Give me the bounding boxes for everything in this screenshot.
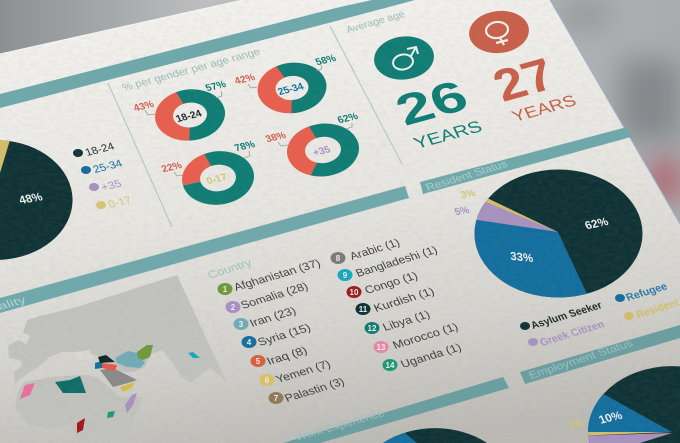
- donut: 25-34: 25-34: [276, 81, 306, 98]
- donut percentage labels: 38%: [264, 130, 288, 145]
- country list: Syria (15): [256, 322, 313, 349]
- country list: Yemen (7): [274, 359, 333, 386]
- donut: +35: [285, 120, 361, 180]
- pie value: 10%: 10%: [597, 410, 624, 427]
- pie chart: work experience: [383, 428, 487, 443]
- pie chart: resident status: [454, 170, 642, 298]
- donut percentage labels: 62%: [336, 111, 360, 126]
- map: countries of origin: [8, 275, 227, 443]
- country list: Libya (1): [381, 309, 432, 334]
- heading: average age: Average age: [344, 9, 407, 36]
- country list: Congo (1): [363, 270, 420, 297]
- donut percentage labels: 42%: [233, 72, 257, 87]
- legend: resident status: Refugee: [624, 281, 670, 304]
- country list: Bangladeshi (1): [354, 244, 440, 280]
- heading: country: Country: [206, 257, 255, 282]
- country list: 9: [343, 271, 348, 280]
- stat: female average 27 years: [485, 48, 579, 126]
- country list: 4: [247, 338, 252, 347]
- divider lines: [108, 26, 402, 227]
- icon: female symbol: [467, 8, 531, 56]
- legend: age range: 18-24: [83, 141, 116, 159]
- legend: resident status: Greek Citizen: [538, 319, 606, 349]
- donut: +35: +35: [311, 144, 333, 159]
- donut: 0-17: [182, 149, 254, 207]
- stat: female average 27 years: YEARS: [509, 92, 579, 126]
- legend: resident status: Asylum Seeker: [529, 300, 604, 332]
- country list: Afghanistan (37): [232, 258, 323, 294]
- pie value: 3%: 3%: [459, 188, 477, 201]
- band: employment status: [520, 325, 680, 384]
- icon: male symbol: [372, 33, 436, 83]
- band: work experience: [283, 377, 509, 443]
- country list: Uganda (1): [399, 342, 464, 371]
- stat: female average 27 years: 27: [485, 48, 563, 111]
- country list: Iran (23): [248, 305, 298, 330]
- donut percentage labels: 57%: [204, 79, 228, 94]
- stat: male average 26 years: 26: [388, 72, 476, 135]
- band: nationality: [0, 186, 409, 313]
- country list: 6: [265, 376, 270, 385]
- pie chart: employment status: [567, 366, 680, 443]
- country list: 10: [350, 288, 359, 297]
- country list: 13: [377, 343, 386, 352]
- heading: % per gender per age range: % per gender per age range: [120, 46, 263, 94]
- legend: resident status: [520, 281, 680, 349]
- donut: 18-24: [155, 88, 225, 142]
- country list: [218, 237, 464, 405]
- country list: Kurdish (1): [372, 286, 437, 315]
- donut percentage labels: [132, 53, 360, 175]
- country list: 2: [231, 303, 236, 312]
- legend: age range: [73, 141, 134, 211]
- band: top header strip: [0, 0, 415, 108]
- donut percentage labels: 43%: [132, 99, 156, 114]
- pie value: 1%: 1%: [567, 418, 585, 431]
- band label: employment status: Employment Status: [527, 338, 635, 382]
- donut: 0-17: 0-17: [205, 172, 229, 187]
- country list: 5: [256, 357, 261, 366]
- band: resident status: [420, 127, 631, 194]
- country list: Iraq (8): [265, 345, 310, 368]
- country list: 7: [274, 394, 279, 403]
- pie value: 48%: 48%: [18, 191, 44, 207]
- donut: 25-34: [256, 60, 328, 116]
- country list: Palastin (3): [283, 376, 347, 405]
- donut: 18-24: 18-24: [174, 108, 204, 125]
- country list: 11: [359, 305, 368, 314]
- country list: Morocco (1): [391, 321, 460, 352]
- country list: 8: [336, 254, 341, 263]
- pie chart: age range: [0, 130, 73, 260]
- stat: male average 26 years: [388, 72, 485, 153]
- country list: 3: [239, 320, 244, 329]
- country list: 14: [386, 361, 395, 370]
- donut percentage labels: 22%: [160, 160, 184, 175]
- donut percentage labels: 78%: [233, 139, 257, 154]
- donut percentage labels: 58%: [314, 53, 338, 68]
- stat: male average 26 years: YEARS: [410, 117, 485, 153]
- country list: 12: [368, 324, 377, 333]
- donut leader lines: [145, 65, 352, 176]
- legend: age range: +35: [99, 178, 124, 194]
- pie value: 62%: 62%: [583, 216, 610, 232]
- legend: age range: 0-17: [106, 194, 134, 211]
- country list: Somalia (28): [239, 281, 310, 312]
- band label: resident status: Resident Status: [424, 158, 510, 194]
- country list: Arabic (1): [348, 237, 402, 263]
- pie value: 5%: 5%: [453, 205, 471, 218]
- legend: age range: 25-34: [91, 158, 124, 176]
- country list: 1: [223, 285, 228, 294]
- band label: work experience: Work Experience: [293, 407, 387, 443]
- pie value: 33%: 33%: [510, 251, 534, 265]
